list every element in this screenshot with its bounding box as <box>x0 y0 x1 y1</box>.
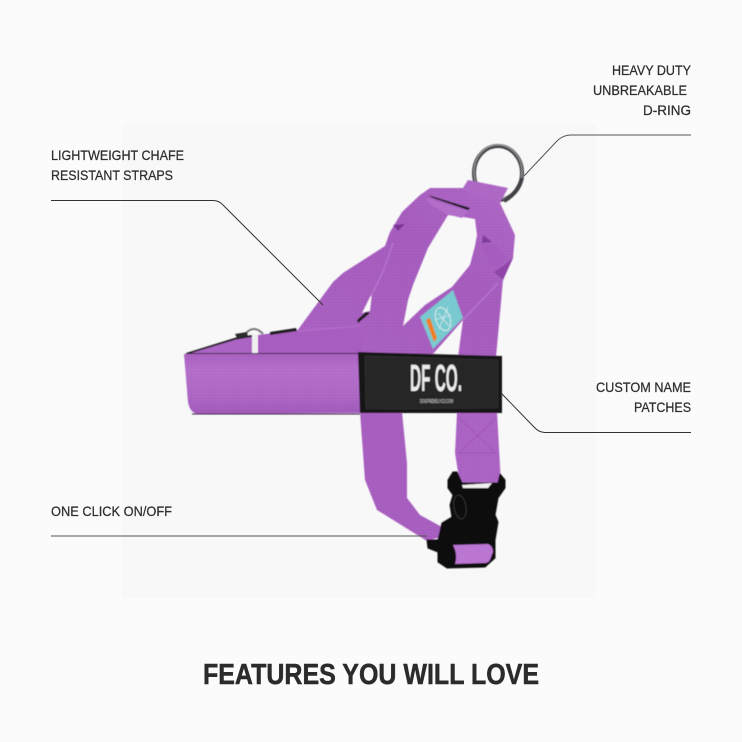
lower left strap <box>360 412 442 541</box>
plastic buckle <box>427 472 505 568</box>
label text: ONE CLICK ON/OFF <box>51 503 172 519</box>
label text: HEAVY DUTY <box>612 62 692 78</box>
callout: chafe resistant straps <box>51 147 323 305</box>
leader line <box>524 135 691 176</box>
leader line <box>501 393 691 432</box>
title: FEATURES YOU WILL LOVE <box>203 659 539 691</box>
label text <box>593 62 692 118</box>
label text: CUSTOM NAME <box>596 379 691 395</box>
upper harness straps and loop <box>297 180 515 357</box>
shoulder fold <box>480 243 505 267</box>
name patch: DF CO. <box>410 358 462 400</box>
leader line <box>51 535 427 537</box>
strap gap strip <box>357 312 370 323</box>
ring front segment <box>504 178 522 201</box>
left fold hole <box>393 224 405 231</box>
label text: PATCHES <box>634 399 691 415</box>
label text: UNBREAKABLE <box>593 82 687 98</box>
label text <box>51 147 184 183</box>
photo backdrop panel <box>122 124 596 598</box>
product: purple dog harness <box>184 145 522 568</box>
label text: LIGHTWEIGHT CHAFE <box>51 147 184 163</box>
leader line <box>51 200 323 305</box>
label text <box>596 379 691 415</box>
strap crease shading <box>371 243 498 320</box>
lighter buckle-side loop segment <box>462 181 507 203</box>
label text: D-RING <box>643 102 691 118</box>
callout: custom name patches <box>501 379 691 432</box>
lower right strap <box>455 412 501 484</box>
patch URL: DOGFRIENDLYCO.COM <box>420 399 453 405</box>
belt top strap with slider <box>186 326 362 354</box>
loop lower lip <box>426 198 468 218</box>
webbing slot <box>428 195 470 210</box>
shoulder fold underside <box>494 258 513 280</box>
label text: RESISTANT STRAPS <box>51 167 173 183</box>
callout: D-ring <box>524 62 692 176</box>
D-ring <box>474 145 522 200</box>
main waist belt <box>184 354 360 414</box>
woven tag <box>420 290 463 349</box>
name patch <box>358 352 502 413</box>
